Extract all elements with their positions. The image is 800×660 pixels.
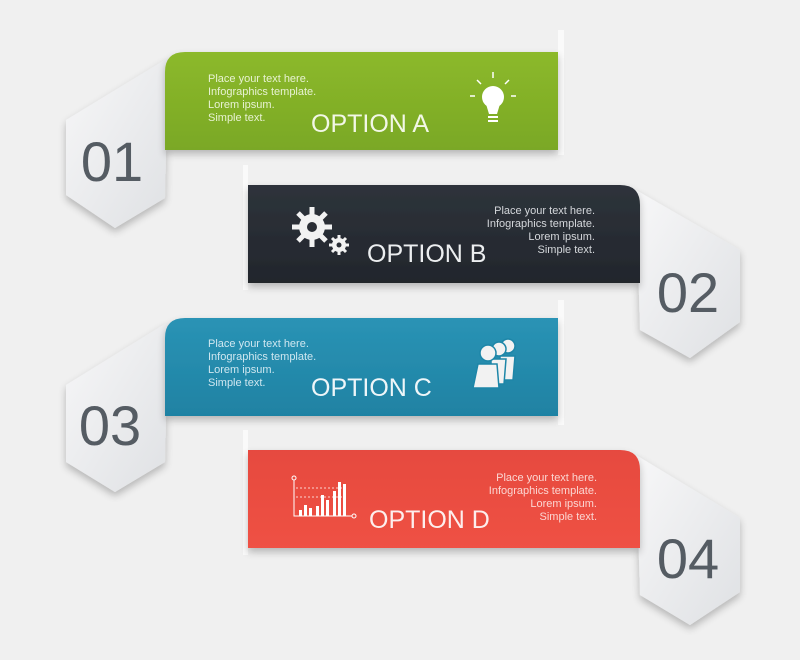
- icon: people: [473, 339, 515, 388]
- text B: [487, 205, 595, 256]
- text C: Infographics template.: [208, 351, 316, 363]
- text A: [208, 73, 316, 124]
- text B: Place your text here.: [494, 205, 595, 217]
- banner A: [165, 52, 558, 150]
- title A: OPTION A: [311, 110, 429, 138]
- text A: Place your text here.: [208, 73, 309, 85]
- hexagon 03: 03: [79, 394, 141, 457]
- text A: Infographics template.: [208, 86, 316, 98]
- icon: bulb: [470, 72, 516, 121]
- text B: Lorem ipsum.: [528, 231, 595, 243]
- banner B: [248, 185, 640, 283]
- text A: Lorem ipsum.: [208, 99, 275, 111]
- hexagon 01: 01: [81, 130, 143, 193]
- title D: OPTION D: [369, 506, 490, 534]
- icon: bar chart: [292, 476, 356, 518]
- icon: gears: [292, 207, 349, 255]
- text A: Simple text.: [208, 112, 265, 124]
- hexagon 02: 02: [657, 261, 719, 324]
- banner C: [165, 318, 558, 416]
- title C: OPTION C: [311, 374, 432, 402]
- hexagon 02: [636, 190, 740, 358]
- text C: Simple text.: [208, 377, 265, 389]
- hexagon 03: [66, 322, 168, 492]
- text D: Place your text here.: [496, 472, 597, 484]
- text B: Simple text.: [538, 244, 595, 256]
- text D: Lorem ipsum.: [530, 498, 597, 510]
- title B: OPTION B: [367, 240, 486, 268]
- hexagon 01: [66, 58, 168, 228]
- text C: Place your text here.: [208, 338, 309, 350]
- text D: [489, 472, 597, 523]
- hexagon 04: 04: [657, 527, 719, 590]
- paper slot strips: [243, 30, 564, 555]
- text B: Infographics template.: [487, 218, 595, 230]
- text D: Simple text.: [540, 511, 597, 523]
- text C: Lorem ipsum.: [208, 364, 275, 376]
- hexagon 04: [636, 455, 740, 625]
- banner D: [248, 450, 640, 548]
- text C: [208, 338, 316, 389]
- text D: Infographics template.: [489, 485, 597, 497]
